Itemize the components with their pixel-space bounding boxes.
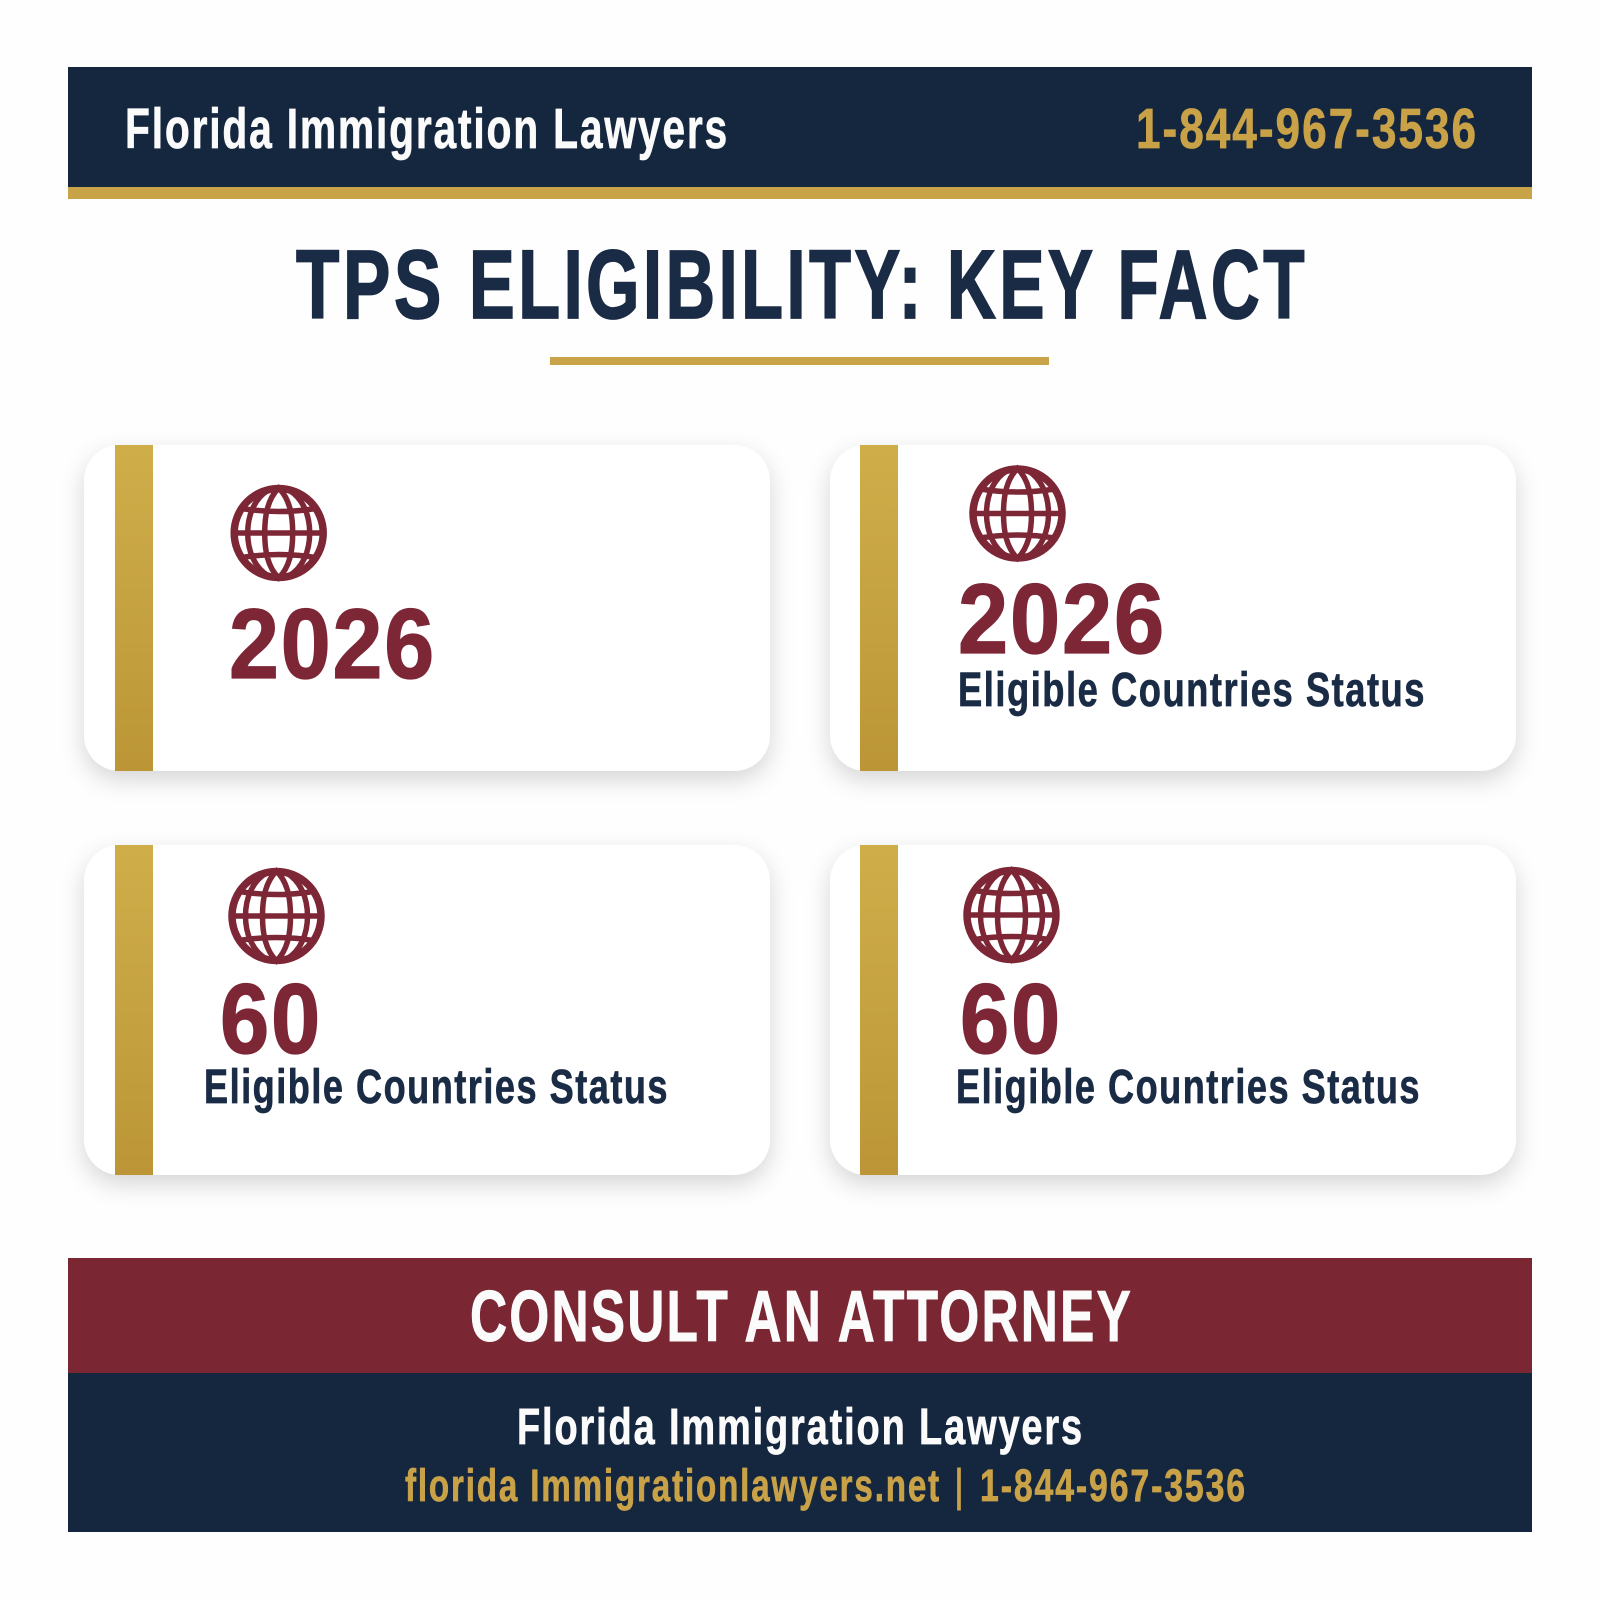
stat label: Eligible Countries Status [956,1061,1421,1114]
header banner [68,67,1532,199]
stat: 2026: 2026 [229,588,436,699]
call to action banner [68,1258,1532,1373]
card: bottom right [830,845,1516,1175]
title: KEY FACT [947,230,1308,339]
title [296,230,1308,339]
header firm name: Florida Immigration Lawyers [125,97,729,161]
icon: globe [966,870,1056,960]
stat: 60: 60 [960,963,1062,1074]
icon: globe [234,488,324,578]
stat label: Eligible Countries Status [204,1061,669,1114]
footer website and phone: | [953,1459,965,1511]
icon: globe [972,468,1062,558]
footer website and phone: florida Immigrationlawyers.net [405,1460,941,1511]
title: TPS [296,230,445,339]
card: top right [830,445,1516,771]
footer panel [68,1373,1532,1532]
stat: 2026: 2026 [958,563,1166,674]
stat: 60: 60 [220,963,322,1074]
title underline [550,357,1049,365]
call to action text: CONSULT AN ATTORNEY [470,1277,1133,1357]
card: bottom left [84,845,770,1175]
stat label: Eligible Countries Status [958,664,1426,717]
title: ELIGIBILITY: [469,230,925,339]
icon: globe [232,871,322,961]
footer website and phone: 1-844-967-3536 [980,1460,1247,1511]
header phone number: 1-844-967-3536 [1136,97,1478,161]
card: top left [84,445,770,771]
footer firm name: Florida Immigration Lawyers [517,1398,1084,1455]
